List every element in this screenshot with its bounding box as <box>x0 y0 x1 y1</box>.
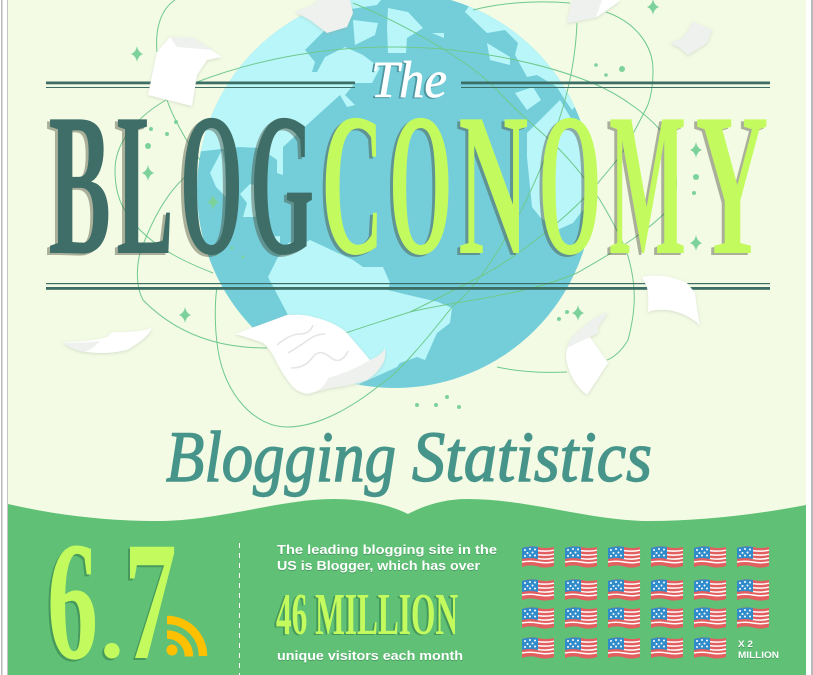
subtitle: Blogging Statistics: Statistics <box>412 417 652 497</box>
stat: 6.7 <box>47 507 177 675</box>
flag legend: MILLION <box>738 650 779 660</box>
paper: right <box>642 275 700 325</box>
sparkles and dots <box>131 0 702 409</box>
subtitle: Blogging Statistics: Blogging <box>166 417 396 497</box>
stat: 46 million: 46 MILLION <box>276 581 458 647</box>
orbit lines <box>115 0 676 427</box>
title: BLOGCONOMY: G <box>250 71 314 298</box>
title: BLOGCONOMY: L <box>116 72 174 297</box>
flag legend: X 2 <box>738 639 753 649</box>
flag grid <box>522 546 769 659</box>
flag legend <box>738 639 779 660</box>
paper: centre scroll <box>235 315 385 394</box>
divider <box>238 543 240 675</box>
title: BLOGCONOMY: B <box>48 73 111 298</box>
title: BLOGCONOMY: O <box>180 72 243 298</box>
title: BLOGCONOMY: C <box>322 72 383 297</box>
paper: lower right <box>566 312 608 395</box>
title: BLOGCONOMY: M <box>609 72 686 298</box>
title: BLOGCONOMY <box>48 71 768 298</box>
stat text block: US is Blogger, which has over <box>277 559 480 573</box>
title: BLOGCONOMY: Y <box>695 72 768 297</box>
paper: lower left <box>63 328 152 353</box>
subtitle: Blogging Statistics <box>166 417 652 497</box>
globe <box>197 0 584 388</box>
title: The: The <box>371 52 447 109</box>
stat text block: The leading blogging site in the <box>277 543 497 557</box>
title: BLOGCONOMY: O <box>389 72 452 298</box>
title: BLOGCONOMY: N <box>458 72 528 298</box>
icon: rss <box>166 620 203 656</box>
paper: top centre <box>295 0 353 33</box>
papers <box>63 0 712 395</box>
stat text block <box>277 543 497 663</box>
green wave section <box>8 499 806 675</box>
paper: top left <box>148 37 222 106</box>
paper: right upper <box>670 22 712 55</box>
stat text block: unique visitors each month <box>277 649 463 663</box>
title: BLOGCONOMY: O <box>538 72 601 298</box>
stat: 6.7: . <box>100 572 124 675</box>
paper: top right <box>567 0 620 23</box>
rule lines <box>46 82 770 290</box>
